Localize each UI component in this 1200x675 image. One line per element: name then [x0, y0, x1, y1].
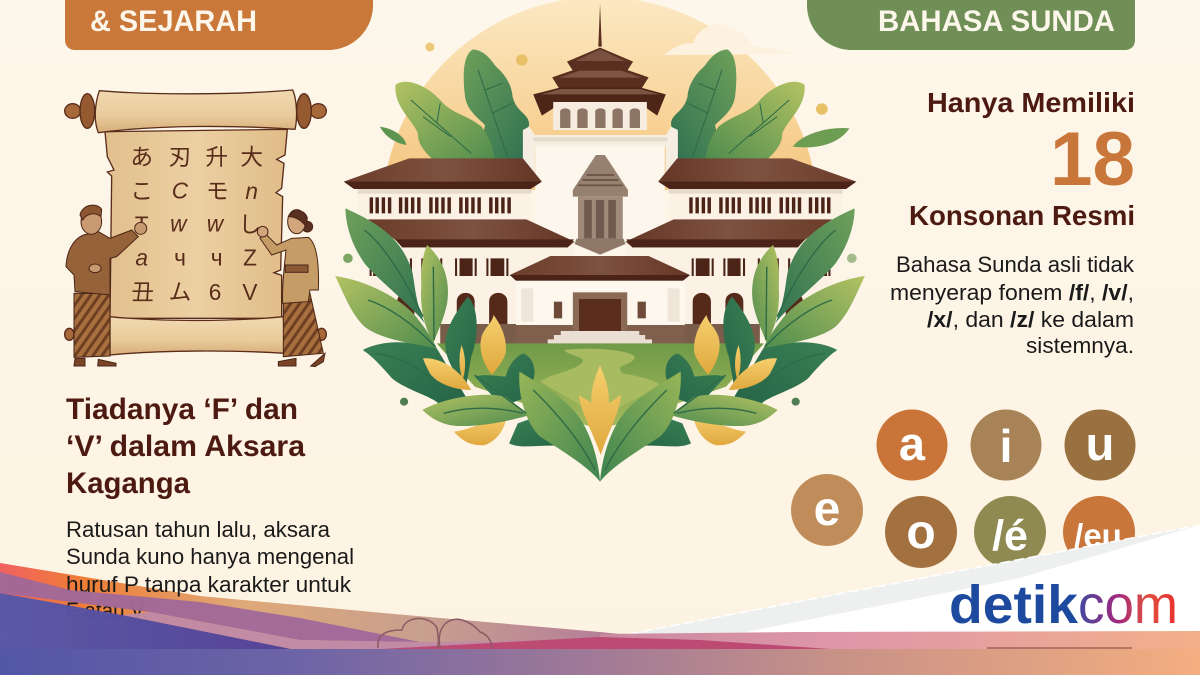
logo: detikcom: [949, 575, 1178, 635]
logo: detikcom: detik: [949, 575, 1079, 635]
foliage: right wreath: [600, 208, 865, 482]
lawn and foliage wreath: [335, 208, 865, 482]
script characters on scroll: 6: [209, 279, 221, 305]
footer: white ribbon: [629, 525, 1200, 640]
heading: Tiadanya F dan V: [66, 393, 305, 500]
vowel i: [970, 410, 1042, 480]
script characters on scroll: モ: [206, 178, 229, 204]
decorative dots: [343, 43, 857, 263]
footer: gradient band: [0, 649, 1200, 675]
footer: coloured ribbons: [0, 572, 1200, 650]
text block: fonem: menyerap fonem /f/, /v/,: [890, 280, 1134, 305]
building: left wing: [344, 158, 575, 344]
panel: heading tab language: [807, 0, 1135, 50]
text block: fonem: Bahasa Sunda asli tidak: [896, 252, 1135, 277]
building: central block: [523, 127, 678, 253]
script characters on scroll: 升: [205, 144, 228, 170]
vowel a: [876, 410, 948, 480]
script characters on scroll: C: [172, 177, 189, 203]
script characters on scroll: ч: [211, 245, 223, 271]
script characters on scroll: し: [239, 211, 261, 237]
text block: aksara Sunda kuno: [66, 517, 354, 623]
script characters on scroll: V: [242, 279, 258, 305]
vowel é: [974, 496, 1046, 568]
building: pagoda tower: [533, 4, 666, 130]
vowel bubbles: [791, 410, 1136, 568]
script characters on scroll: こ: [130, 178, 153, 204]
vowel eu: [1063, 496, 1135, 568]
script characters on scroll: n: [245, 178, 258, 204]
building: right wing: [626, 158, 856, 344]
script characters on scroll: Z: [243, 245, 257, 271]
leaves behind building, left: [380, 49, 529, 160]
script characters on scroll: ム: [169, 279, 191, 305]
heading: Hanya Memiliki: Hanya Memiliki: [927, 87, 1135, 118]
text block: aksara Sunda kuno: Sunda kuno hanya mengenal: [66, 544, 354, 569]
text block: aksara Sunda kuno: F atau V.: [66, 598, 148, 623]
text block: aksara Sunda kuno: Ratusan tahun lalu, aksara: [66, 517, 330, 542]
text block: fonem: /x/, dan /z/ ke dalam: [927, 307, 1134, 332]
panel: heading tab history: [65, 0, 373, 50]
heading: Tiadanya F dan V: Kaganga: [66, 467, 190, 500]
script characters on scroll: あ: [130, 144, 153, 170]
icon: sun disc: [388, 0, 812, 190]
script characters on scroll: [130, 144, 263, 305]
vowel o: [885, 496, 957, 568]
script characters on scroll: a: [135, 245, 148, 271]
building: small central tower: [573, 155, 628, 255]
lawn: [437, 343, 764, 430]
figure: woman: [257, 210, 325, 367]
illustration: scroll with two figures: [65, 90, 326, 367]
panel: heading tab history: & SEJARAH: [90, 5, 257, 38]
script characters on scroll: ч: [174, 245, 186, 271]
illustration: Gedung Sate building with foliage: [335, 0, 865, 482]
vowel o: o: [906, 506, 936, 559]
vowel u: [1064, 410, 1136, 480]
panel: heading tab language: BAHASA SUNDA: [878, 5, 1115, 38]
script characters on scroll: 大: [240, 144, 263, 170]
footer ribbon: top wedge: [0, 563, 650, 650]
big number: 18: 18: [1050, 117, 1135, 202]
vowel é: /é: [992, 512, 1028, 560]
heading: Tiadanya F dan V: ‘V’ dalam Aksara: [66, 430, 305, 463]
script characters on scroll: 刃: [169, 144, 191, 170]
vowel a: a: [899, 417, 926, 470]
vowel eu: /eu: [1074, 517, 1122, 554]
script characters on scroll: w: [207, 211, 225, 237]
vowel i: i: [1000, 420, 1012, 472]
script characters on scroll: w: [170, 211, 188, 237]
text block: fonem: sistemnya.: [1026, 333, 1134, 358]
text block: aksara Sunda kuno: huruf P tanpa karakter untuk: [66, 572, 352, 597]
text block: fonem: [890, 252, 1135, 358]
heading: Tiadanya F dan V: Tiadanya ‘F’ dan: [66, 393, 298, 426]
dark dots: [400, 398, 800, 406]
building: front portico: [510, 256, 690, 344]
foliage: left wreath: [335, 208, 600, 482]
script characters on scroll: 丑: [131, 279, 154, 305]
foliage: central gold leaf: [579, 365, 621, 455]
figure: man: [66, 205, 147, 366]
vowel e: [791, 474, 863, 546]
icon: cloud: [664, 24, 792, 55]
leaves behind building, right: [671, 49, 849, 160]
logo: detikcom: com: [1078, 575, 1178, 635]
icon: scroll: [65, 90, 326, 355]
vowel e: e: [814, 483, 840, 536]
script characters on scroll: T: [135, 211, 149, 237]
heading: Konsonan Resmi: Konsonan Resmi: [909, 200, 1135, 231]
vowel u: u: [1086, 417, 1114, 470]
